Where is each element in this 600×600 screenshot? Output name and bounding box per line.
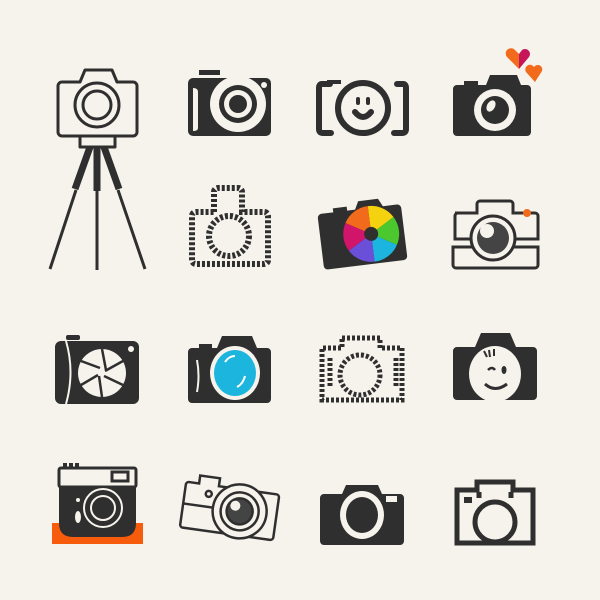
icon: sketchy camera 2 [322, 338, 402, 400]
icon: sketchy camera [192, 188, 268, 264]
icon: camera on tripod [50, 70, 145, 270]
icon: retro camera in orange case [52, 463, 143, 544]
icon: aperture camera [55, 335, 139, 404]
icon: solid camera [320, 485, 404, 545]
icon: compact camera [188, 70, 271, 136]
icon: tilted outline camera [179, 474, 280, 543]
icon: bold outline camera [457, 482, 533, 543]
icon: blue lens camera [188, 336, 271, 403]
icon: smiley camera [319, 80, 406, 133]
icon: winking face camera [453, 333, 537, 402]
icon: camera with hearts [453, 48, 542, 136]
icon: rainbow aperture camera [316, 196, 408, 270]
icon: outline camera with orange dot [453, 201, 538, 268]
